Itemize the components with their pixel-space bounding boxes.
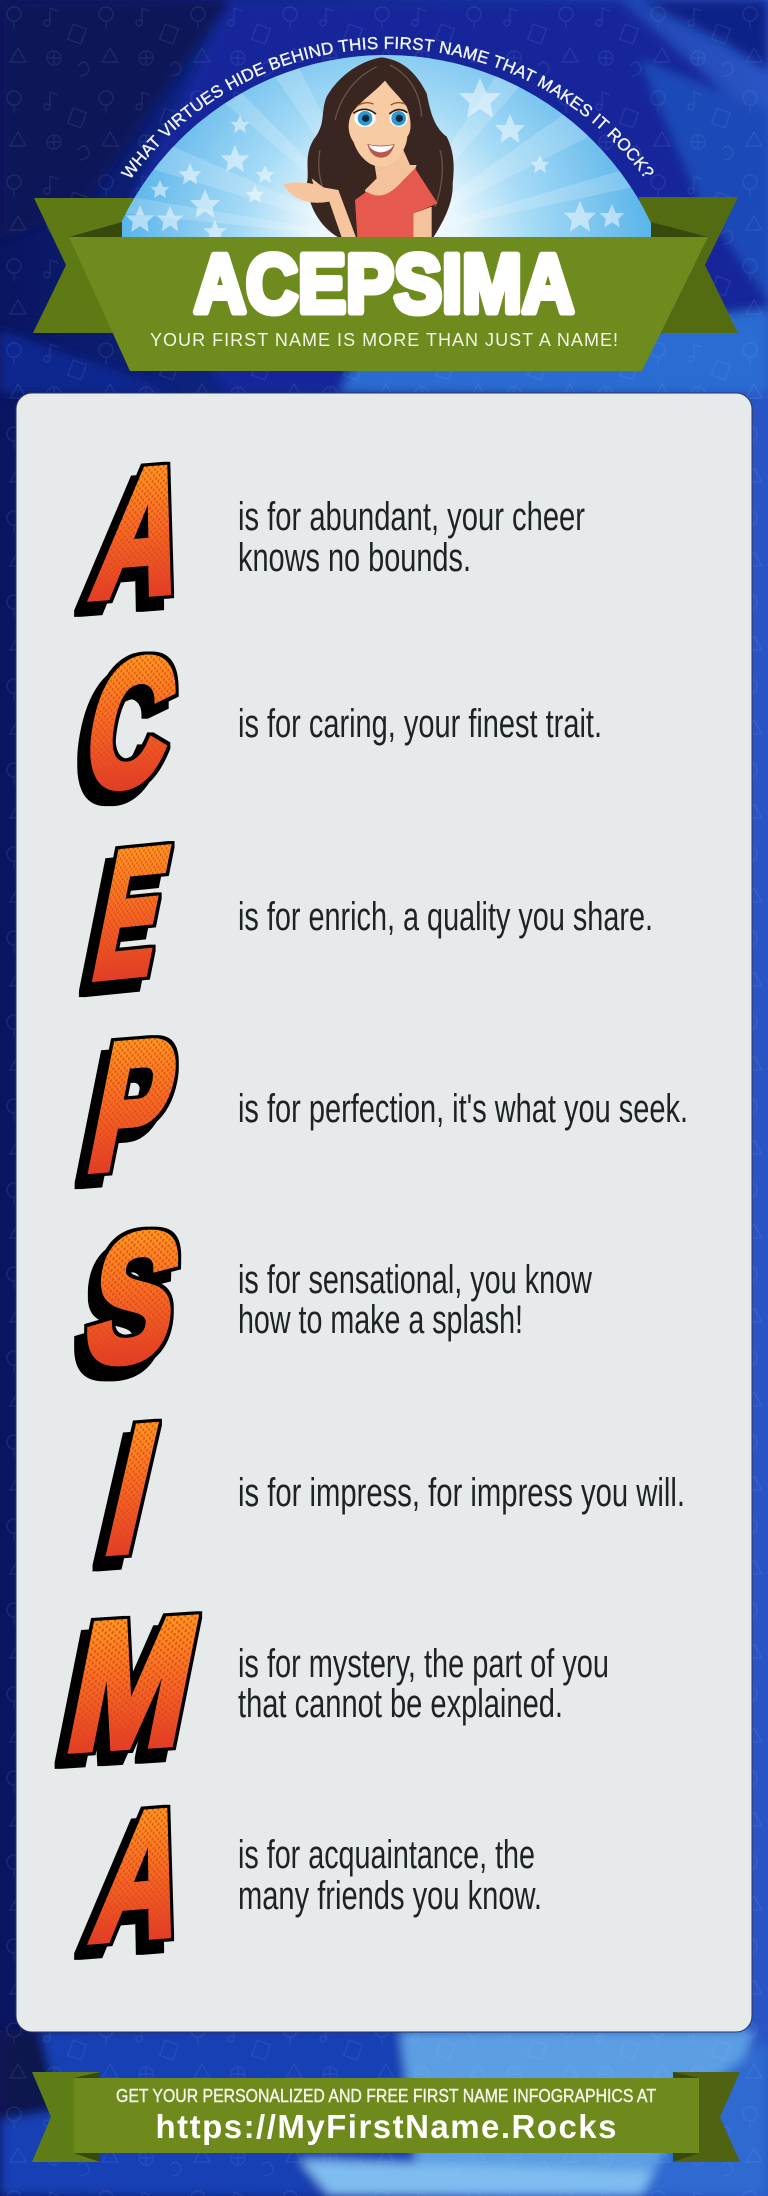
letter P: P <box>76 1002 191 1209</box>
content panel <box>16 393 752 2032</box>
tagline: YOUR FIRST NAME IS MORE THAN JUST A NAME! <box>150 330 618 350</box>
letter I: I <box>93 1386 172 1590</box>
row: I impress <box>93 1386 685 1590</box>
description: is for acquaintance, the <box>238 1833 535 1877</box>
footer ribbon <box>32 2072 740 2162</box>
row: C caring <box>73 620 602 827</box>
name title: ACEPSIMA <box>194 237 574 330</box>
letter C: C <box>73 620 189 827</box>
description: how to make a splash! <box>238 1298 523 1342</box>
description: is for sensational, you know <box>238 1258 592 1302</box>
description: knows no bounds. <box>238 536 471 580</box>
row: S sensational <box>74 1196 592 1402</box>
letter A: A <box>81 429 203 636</box>
sunburst dome <box>121 55 651 237</box>
description: is for abundant, your cheer <box>238 495 585 539</box>
row: P perfection <box>76 1002 688 1209</box>
letter S: S <box>74 1196 194 1402</box>
stars <box>126 78 624 242</box>
hair <box>307 57 454 237</box>
top ribbon tails <box>33 197 738 333</box>
description: is for caring, your finest trait. <box>238 702 602 746</box>
character: woman presenting <box>283 57 454 237</box>
arm and hand <box>283 178 356 237</box>
letter A: A <box>81 1772 203 1979</box>
neck and chest <box>365 150 417 197</box>
letter M: M <box>55 1579 212 1788</box>
curved headline: WHAT VIRTUES HIDE BEHIND THIS FIRST NAME THAT MAKES IT ROCK? <box>120 36 654 178</box>
row: E enrich <box>81 809 653 1017</box>
main ribbon <box>69 237 708 371</box>
mouth <box>367 144 395 158</box>
face <box>349 81 411 167</box>
ribbon folds <box>69 222 708 237</box>
row: M mystery <box>55 1579 609 1788</box>
row: A abundant <box>81 429 585 636</box>
description: that cannot be explained. <box>238 1682 563 1726</box>
footer url: https://MyFirstName.Rocks <box>156 2108 616 2145</box>
row: A acquaintance <box>81 1772 542 1979</box>
light rays <box>126 68 631 230</box>
letter E: E <box>81 809 182 1017</box>
description: is for mystery, the part of you <box>238 1642 609 1686</box>
eyes <box>353 103 408 127</box>
description: many friends you know. <box>238 1874 542 1918</box>
footer call to action: GET YOUR PERSONALIZED AND FREE FIRST NAME INFOGRAPHICS AT <box>116 2086 656 2106</box>
hair highlights <box>319 65 442 207</box>
shirt <box>355 168 438 237</box>
